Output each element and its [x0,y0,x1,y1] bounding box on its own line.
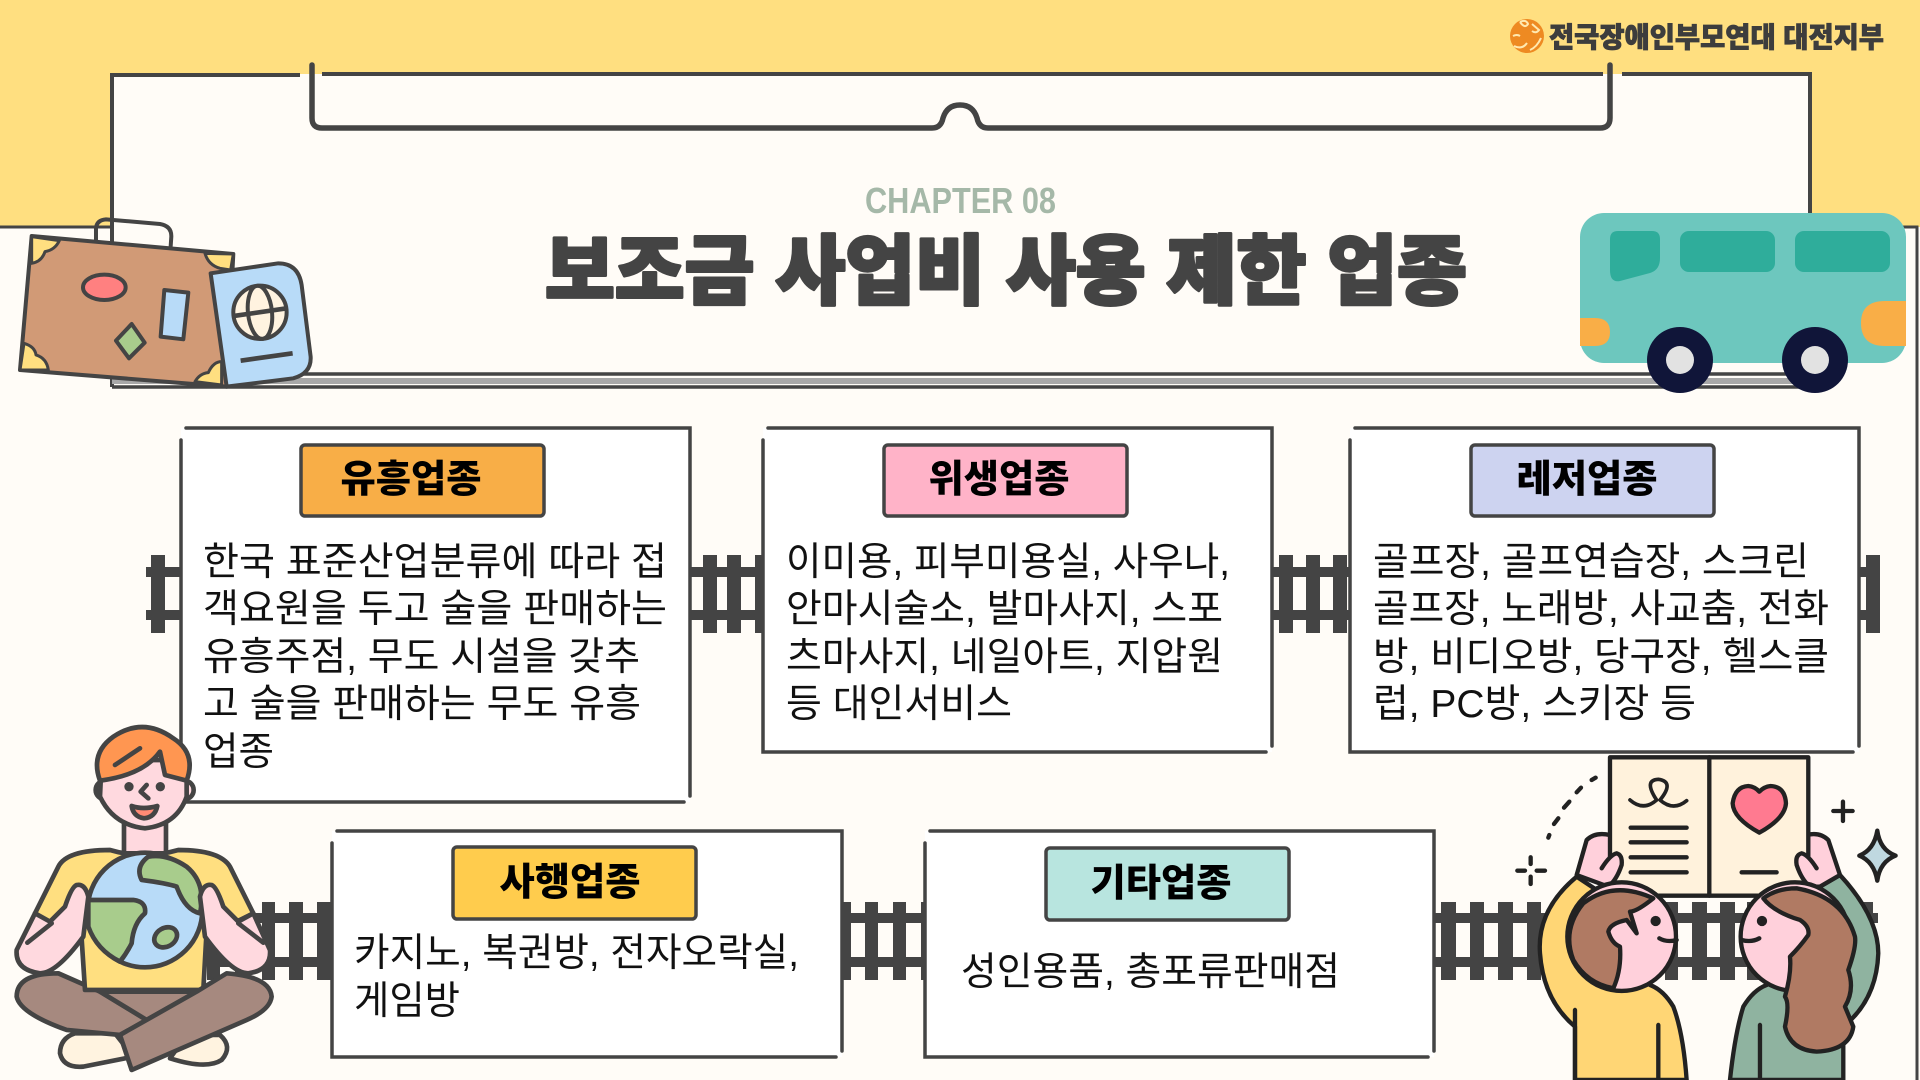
text: 레저업종 description: 골프장, 노래방, 사교춤, 전화 [1373,588,1829,631]
badge: 기타업종: 기타업종 [1090,863,1232,905]
text: 위생업종 description: 츠마사지, 네일아트, 지압원 [786,636,1223,679]
text: 유흥업종 description: 객요원을 두고 술을 판매하는 [203,588,667,631]
panel: 유흥업종 [181,428,690,802]
text: 위생업종 description: 이미용, 피부미용실, 사우나, [786,541,1230,584]
text: 유흥업종 description: 업종 [203,731,274,774]
text: 기타업종 description: 성인용품, 총포류판매점 [961,951,1340,994]
text: 레저업종 description: 럽, PC방, 스키장 등 [1373,683,1696,726]
text: 유흥업종 description: 유흥주점, 무도 시설을 갖추 [203,636,640,679]
panel: 기타업종 [925,831,1434,1057]
badge: 유흥업종: 유흥업종 [340,459,482,501]
text: 위생업종 description [786,541,1230,726]
illustration: boy holding globe [17,727,272,1070]
upper railway track [146,555,1880,633]
text: 레저업종 description: 골프장, 골프연습장, 스크린 [1373,541,1809,584]
text: 유흥업종 description: 한국 표준산업분류에 따라 접 [203,541,667,584]
badge: 레저업종 [1471,445,1714,516]
badge: 사행업종: 사행업종 [500,862,640,904]
panel: 레저업종 [1350,428,1859,752]
illustration: two people holding open book [1517,757,1896,1080]
text: 레저업종 description [1373,541,1829,726]
chapter label: CHAPTER 08 [865,180,1056,221]
badge: 기타업종 [1046,848,1289,920]
text: 사행업종 description: 게임방 [354,980,460,1023]
text: 레저업종 description: 방, 비디오방, 당구장, 헬스클 [1373,636,1829,679]
text: 사행업종 description: 카지노, 복권방, 전자오락실, [354,932,799,975]
text: 위생업종 description: 등 대인서비스 [786,683,1012,726]
panel: 사행업종 [332,831,842,1057]
text: 유흥업종 description [203,541,667,774]
badge: 위생업종: 위생업종 [928,459,1070,501]
text: 사행업종 description [354,932,799,1023]
text: 유흥업종 description: 고 술을 판매하는 무도 유흥 [203,683,641,726]
badge: 위생업종 [884,445,1127,516]
header frame [112,65,1810,387]
badge: 유흥업종 [301,445,544,516]
lower railway track [207,902,1878,980]
title: 보조금 사업비 사용 제한 업종 [545,230,1467,315]
badge: 사행업종 [453,847,696,919]
logo and organisation name: 전국장애인부모연대 대전지부 [1549,22,1884,53]
badge: 레저업종: 레저업종 [1516,459,1658,501]
icon: suitcase and passport [20,219,311,387]
text: 위생업종 description: 안마시술소, 발마사지, 스포 [786,588,1223,631]
icon: bus [1580,213,1906,393]
panel: 위생업종 [763,428,1272,752]
